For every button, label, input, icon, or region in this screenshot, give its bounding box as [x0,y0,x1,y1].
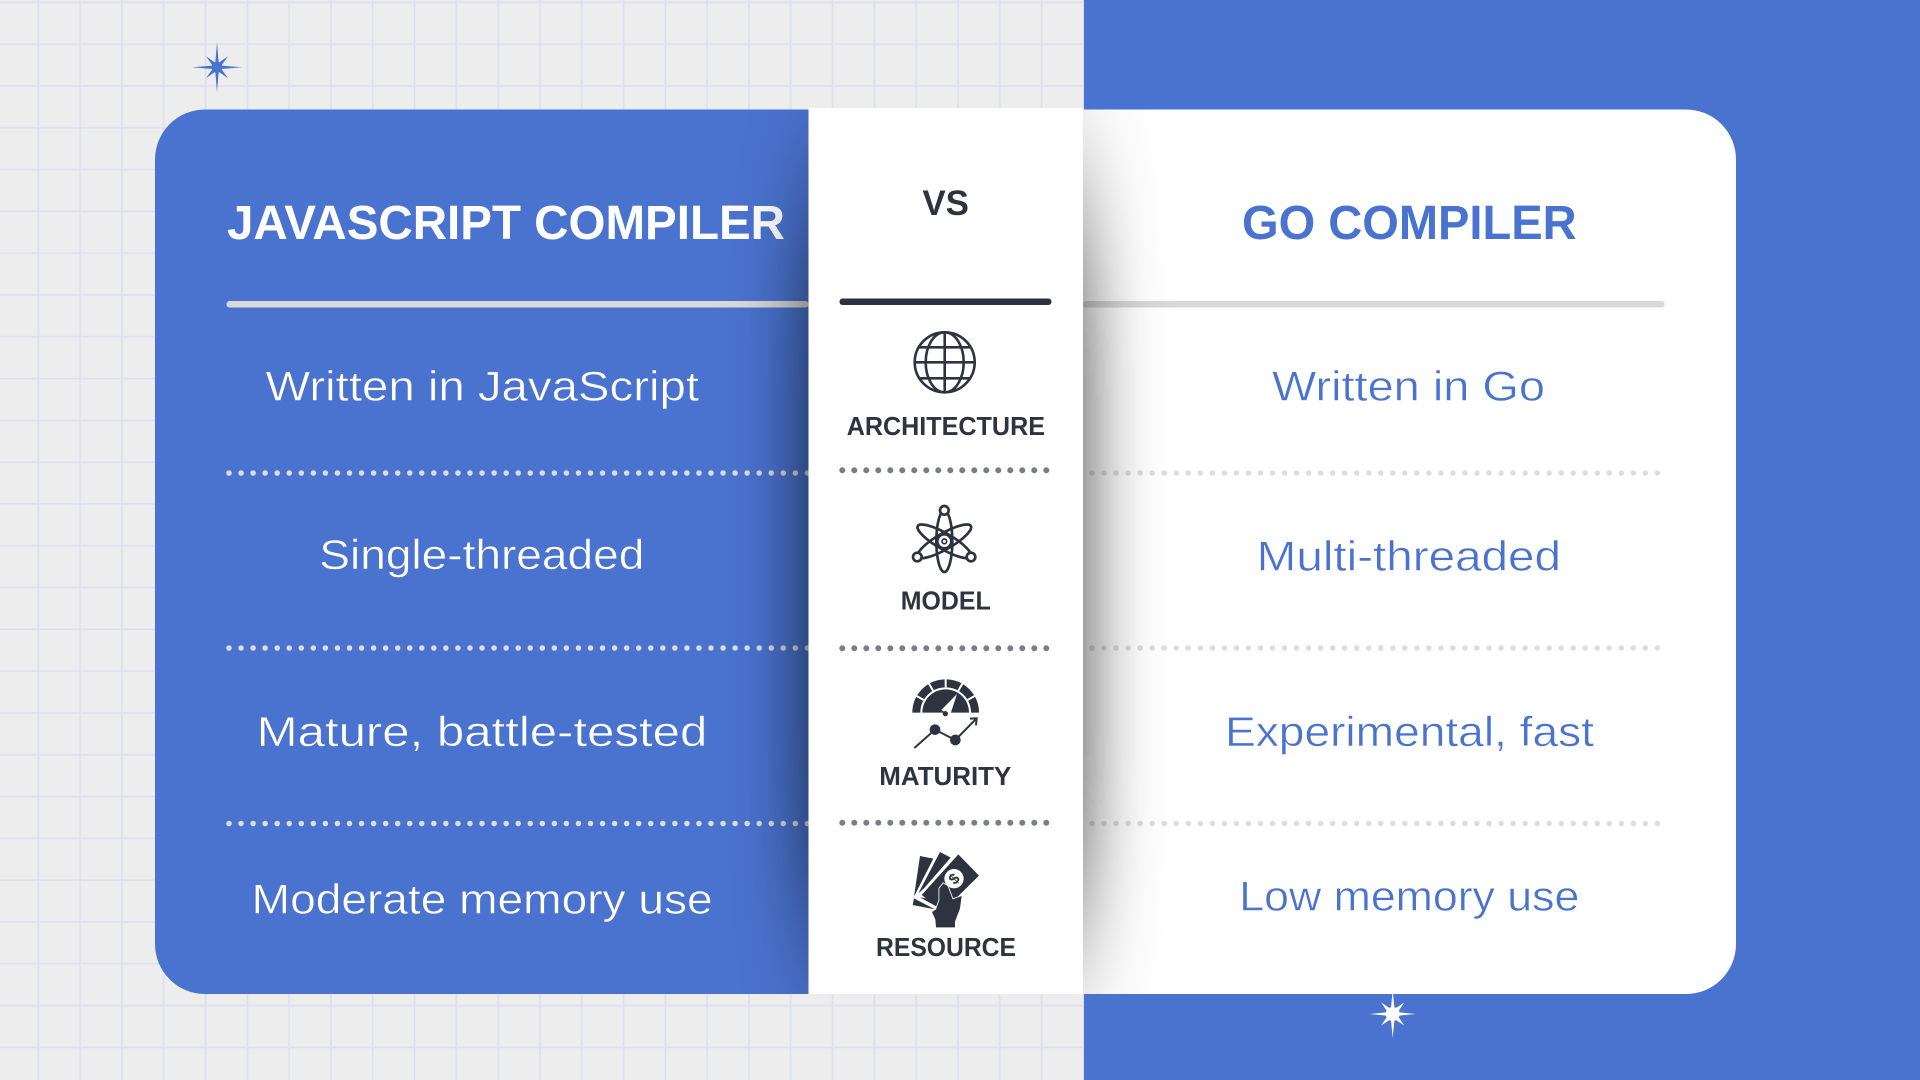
header rule left [226,301,808,308]
label: architecture: ARCHITECTURE [847,411,1045,441]
background: blue right block [1084,0,1920,1080]
center header rule [840,298,1052,305]
icon: white sparkle star [1370,990,1416,1038]
dotted divider center 1 [842,467,1048,473]
dotted divider right 3 [1092,821,1658,826]
label: resource: RESOURCE [876,932,1016,962]
label: model: MODEL [901,586,991,616]
icon: blue sparkle star [192,42,242,92]
text: low memory use: Low memory use [1239,873,1579,920]
dotted divider left 3 [229,821,808,826]
icon: hand holding money [913,852,979,927]
text: single-threaded: Single-threaded [319,531,644,578]
background: grid paper [0,0,1084,1080]
icon: gauge with trend line [914,677,977,748]
heading: JavaScript compiler: JAVASCRIPT COMPILER [227,197,785,250]
text: written in Go: Written in Go [1272,363,1545,410]
icon: globe [915,332,975,392]
dotted divider left 1 [229,470,808,476]
icon: hand holding money: $ [946,870,964,888]
text: multi-threaded: Multi-threaded [1257,533,1561,580]
dotted divider left 2 [229,645,808,651]
panel: Go compiler [1083,110,1736,994]
dotted divider right 1 [1092,470,1658,476]
dotted divider center 3 [842,820,1048,826]
text: moderate memory use: Moderate memory use [252,876,713,923]
panel: JavaScript compiler [155,110,808,994]
dotted divider center 2 [842,645,1048,651]
label: maturity: MATURITY [879,761,1011,791]
heading: Go compiler: GO COMPILER [1242,197,1577,250]
text: mature, battle-tested: Mature, battle-tested [257,708,707,755]
text: experimental, fast: Experimental, fast [1225,708,1594,755]
text: written in JavaScript: Written in JavaScript [266,363,699,410]
icon: atom [913,506,975,572]
heading: VS: VS [922,184,969,223]
panel: center comparison column [808,108,1083,994]
center column shadow [808,200,1083,930]
dotted divider right 2 [1092,645,1658,651]
header rule right [1083,301,1665,308]
